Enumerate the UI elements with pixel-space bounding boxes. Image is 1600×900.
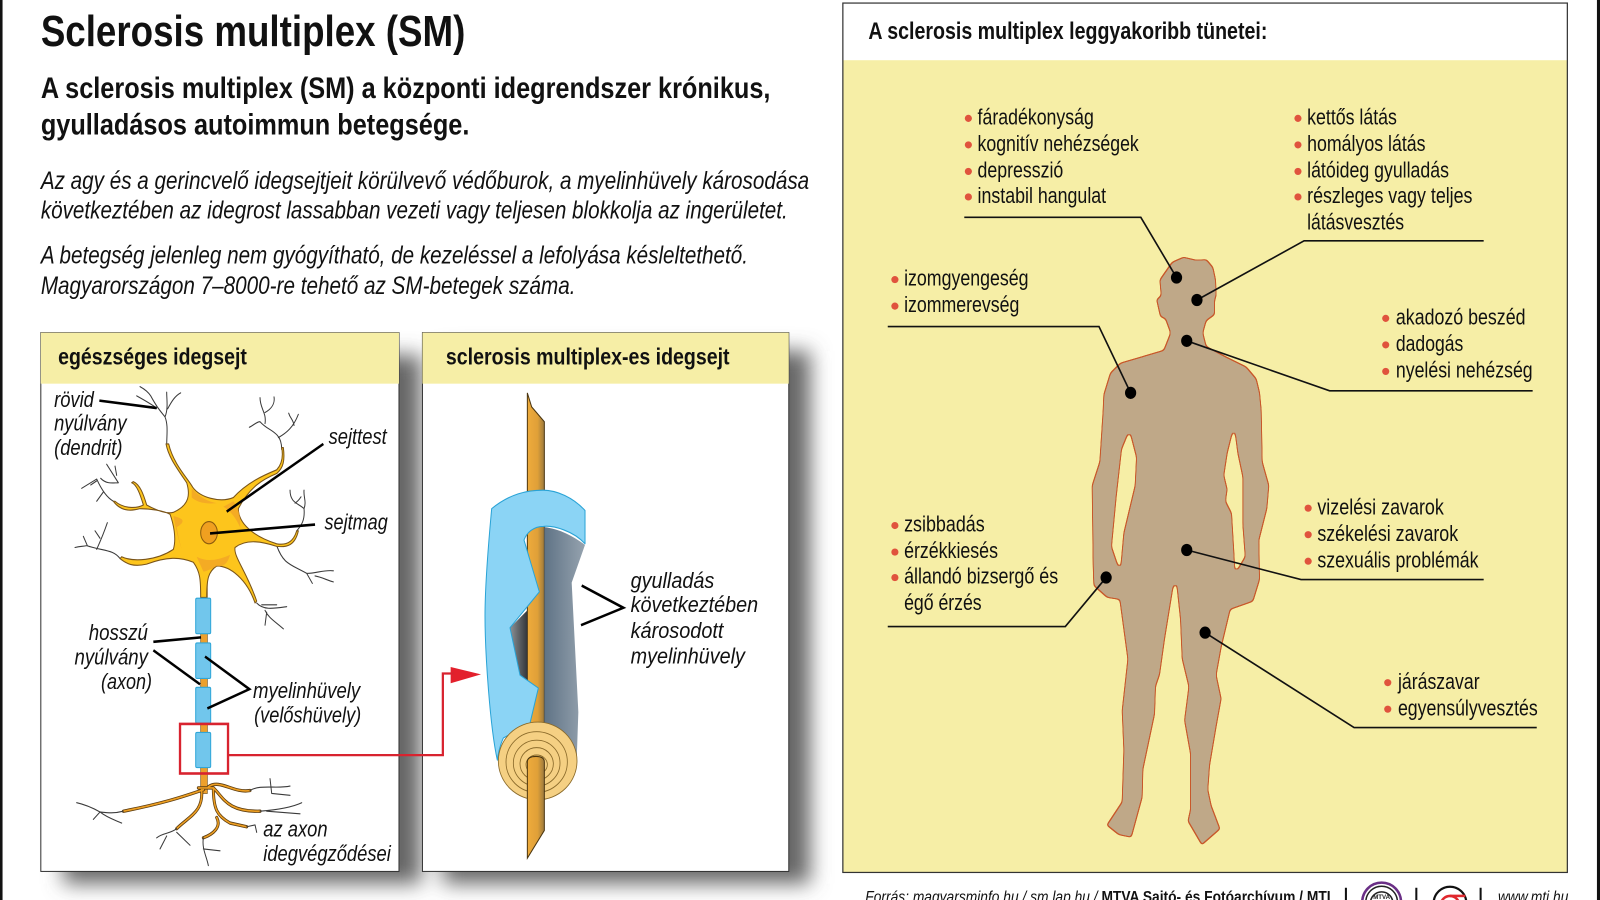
subheading xyxy=(41,72,770,142)
symptoms: sensation: érzékkiesés xyxy=(904,538,998,563)
panel heading: damaged neuron: sclerosis multiplex-es idegsejt xyxy=(446,343,730,369)
red magnifier box xyxy=(180,724,228,773)
symptoms: eyes: részleges vagy teljes xyxy=(1307,183,1472,208)
neuron part labels: nyúlvány xyxy=(74,644,149,669)
symptoms: head: depresszió xyxy=(978,158,1063,183)
human body silhouette xyxy=(1092,257,1269,846)
damage label xyxy=(631,568,758,668)
neuron part labels: nyúlvány xyxy=(54,411,128,436)
symptoms: eyes: látásvesztés xyxy=(1307,210,1404,235)
leader lines xyxy=(888,217,1537,728)
symptoms: eyes xyxy=(1294,104,1472,235)
axon terminals xyxy=(77,779,302,866)
myelin segments xyxy=(196,598,211,768)
neuron part labels: rövid xyxy=(54,387,95,412)
panel: symptoms xyxy=(843,3,1567,872)
neuron part labels: hosszú xyxy=(89,620,148,645)
symptoms: pelvic xyxy=(1305,494,1479,572)
neuron illustration xyxy=(75,387,333,866)
title: Sclerosis multiplex (SM) xyxy=(41,7,465,56)
logo: MTI xyxy=(1434,887,1466,900)
leader lines xyxy=(581,586,623,625)
symptoms: eyes: homályos látás xyxy=(1307,131,1426,156)
symptoms: speech: nyelési nehézség xyxy=(1396,358,1533,383)
intro text block: Az agy és a gerincvelő idegsejtjeit körülvevő védőburok, a myelinhüvely károsodása xyxy=(39,167,809,195)
intro text block xyxy=(39,167,809,300)
neuron part labels: (axon) xyxy=(101,669,152,694)
symptoms: sensation: zsibbadás xyxy=(904,512,985,537)
red connector line xyxy=(229,673,454,755)
symptoms: gait: járászavar xyxy=(1397,669,1480,694)
panel heading: healthy neuron xyxy=(41,333,399,384)
nerve cross section xyxy=(498,722,577,800)
panel heading: healthy neuron: egészséges idegsejt xyxy=(58,343,247,369)
symptoms: head: fáradékonyság xyxy=(978,104,1094,129)
axon lower part xyxy=(527,756,544,858)
panel heading: symptoms: A sclerosis multiplex leggyakoribb tünetei: xyxy=(868,18,1267,45)
panel shadows xyxy=(63,351,810,884)
neuron part labels: myelinhüvely xyxy=(253,678,362,703)
symptoms: muscles: izomgyengeség xyxy=(904,266,1029,291)
symptoms: gait xyxy=(1384,669,1538,720)
panel: damaged neuron xyxy=(422,333,789,871)
damage label: myelinhüvely xyxy=(631,643,746,668)
symptoms: eyes: kettős látás xyxy=(1307,104,1397,129)
cell body shading xyxy=(173,488,240,572)
symptoms: speech xyxy=(1382,304,1533,383)
symptoms: speech: dadogás xyxy=(1396,331,1463,356)
symptoms: head: kognitív nehézségek xyxy=(978,131,1139,156)
symptoms: muscles: izommerevség xyxy=(904,292,1019,317)
symptoms: speech: akadozó beszéd xyxy=(1396,304,1526,329)
subheading: gyulladásos autoimmun betegsége. xyxy=(41,109,469,142)
dendrites xyxy=(75,387,333,629)
intro text block: Magyarországon 7–8000-re tehető az SM-betegek száma. xyxy=(41,272,576,300)
symptoms: pelvic: székelési zavarok xyxy=(1317,521,1459,546)
panel heading: damaged neuron xyxy=(422,333,789,384)
cell body xyxy=(113,444,298,603)
symptoms: head: instabil hangulat xyxy=(978,183,1107,208)
symptoms: sensation: állandó bizsergő és xyxy=(904,564,1058,589)
neuron part labels: (velőshüvely) xyxy=(254,702,361,727)
neuron part labels: sejttest xyxy=(329,424,388,449)
panel: healthy neuron xyxy=(41,333,399,871)
axon xyxy=(201,568,207,793)
neuron part labels: idegvégződései xyxy=(263,841,392,866)
symptoms: pelvic: vizelési zavarok xyxy=(1317,494,1444,519)
exposed inner sheath xyxy=(544,527,585,760)
lesion hole xyxy=(510,610,527,681)
symptoms: sensation: égő érzés xyxy=(904,590,982,615)
neuron part labels: (dendrit) xyxy=(54,435,122,460)
symptoms: pelvic: szexuális problémák xyxy=(1317,547,1479,572)
neuron part labels: sejtmag xyxy=(324,510,388,535)
nucleus xyxy=(201,522,217,544)
body markers xyxy=(1101,271,1211,639)
damage label: károsodott xyxy=(631,618,725,643)
damage label: gyulladás xyxy=(631,568,714,593)
axon upper part xyxy=(527,393,544,727)
intro text block: A betegség jelenleg nem gyógyítható, de kezeléssel a lefolyása késleltethető. xyxy=(39,241,748,269)
symptoms: eyes: látóideg gyulladás xyxy=(1307,158,1449,183)
neuron part labels: az axon xyxy=(263,817,328,842)
symptoms: sensation xyxy=(891,512,1058,615)
label leader lines xyxy=(99,401,323,708)
logo: MTVA xyxy=(1362,883,1401,900)
symptoms: gait: egyensúlyvesztés xyxy=(1398,695,1538,720)
neuron part labels xyxy=(54,387,392,866)
symptoms: muscles xyxy=(891,266,1029,317)
intro text block: következtében az idegrost lassabban vezeti vagy teljesen blokkolja az ingerületet. xyxy=(41,196,788,224)
damage label: következtében xyxy=(631,592,758,617)
myelin sheath xyxy=(485,490,585,760)
subheading: A sclerosis multiplex (SM) a központi idegrendszer krónikus, xyxy=(41,72,770,105)
red arrowhead xyxy=(451,667,481,683)
symptoms: head xyxy=(965,104,1139,208)
footer separators xyxy=(1345,888,1482,900)
damaged myelin illustration xyxy=(451,393,623,858)
